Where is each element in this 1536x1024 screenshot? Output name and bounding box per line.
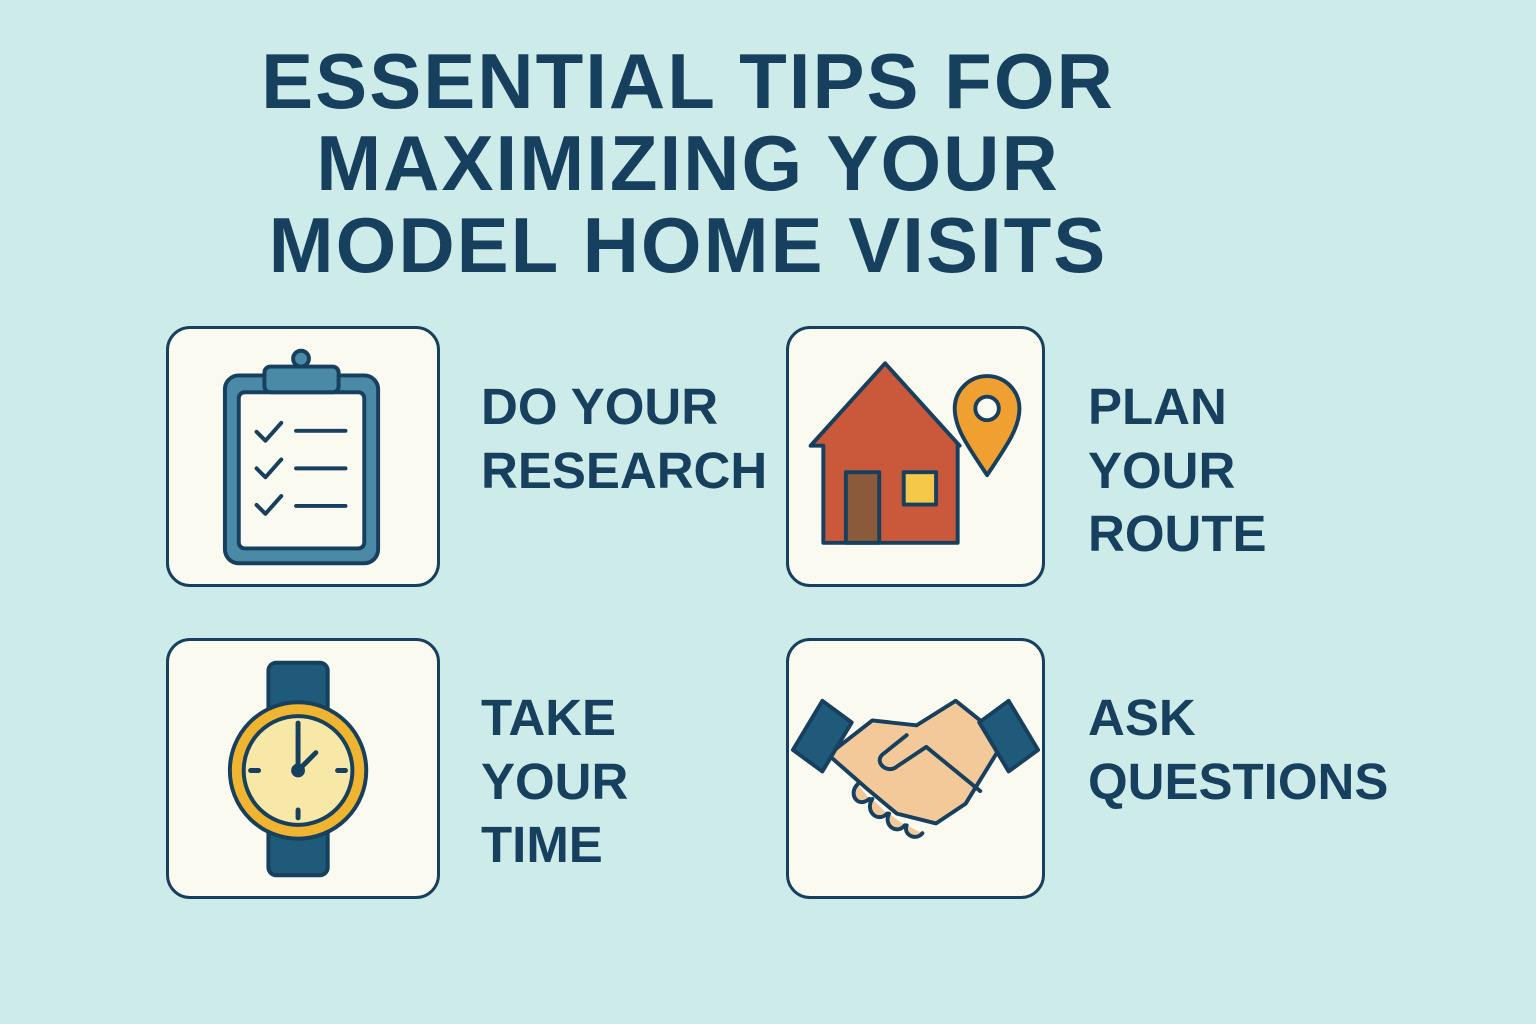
title: ESSENTIAL TIPS FOR <box>261 37 1115 125</box>
label: questions <box>1088 689 1388 810</box>
panel: questions icon <box>786 638 1045 899</box>
label: research <box>481 378 767 498</box>
label: research: RESEARCH <box>481 442 767 498</box>
label: research: DO YOUR <box>481 378 718 435</box>
panel: research icon <box>166 326 440 587</box>
label: time: TIME <box>481 816 603 873</box>
label: questions: QUESTIONS <box>1088 752 1388 810</box>
title: MAXIMIZING YOUR <box>316 119 1060 207</box>
panel: time icon <box>166 638 440 899</box>
icon: house with pin <box>811 363 1019 543</box>
icon: watch <box>230 663 366 875</box>
label: questions: ASK <box>1088 689 1196 746</box>
title <box>261 37 1115 289</box>
label: route <box>1088 378 1266 562</box>
label: route: PLAN <box>1088 378 1227 435</box>
panel: route icon <box>786 326 1045 587</box>
label: route: YOUR <box>1088 442 1235 498</box>
label: route: ROUTE <box>1088 505 1266 562</box>
icon: handshake <box>793 701 1038 837</box>
label: time <box>481 689 628 873</box>
icon: clipboard <box>225 351 378 563</box>
label: time: YOUR <box>481 752 628 810</box>
label: time: TAKE <box>481 689 616 746</box>
title: MODEL HOME VISITS <box>269 201 1107 289</box>
